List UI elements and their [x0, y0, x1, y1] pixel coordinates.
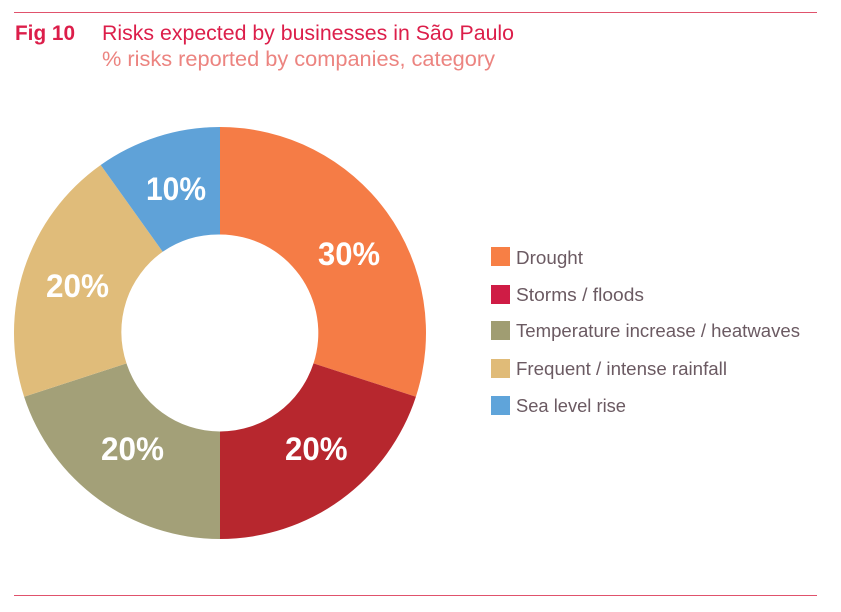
legend item: drought: Drought — [516, 247, 584, 268]
legend item: frequent / intense rainfall: Frequent / intense rainfall — [516, 358, 727, 379]
figure number: Fig 10 — [15, 22, 75, 45]
legend — [491, 247, 800, 416]
value label: 20% temperature: 20% — [101, 431, 164, 467]
segment: storms / floods 20% — [220, 363, 416, 539]
segment: sea level rise 10% — [101, 127, 220, 252]
legend item: sea level rise: Sea level rise — [516, 395, 626, 416]
legend item: temperature increase / heatwaves: Temperature increase / heatwaves — [516, 320, 800, 341]
value label: 10%: 10% — [146, 171, 206, 207]
value label: 20% storms: 20% — [285, 431, 348, 467]
value label: 20% rainfall: 20% — [46, 268, 109, 304]
segment: frequent / intense rainfall 20% — [14, 165, 163, 397]
donut chart — [14, 127, 426, 539]
legend item: storms / floods: Storms / floods — [516, 284, 644, 305]
segment: drought 30% — [220, 127, 426, 397]
title: Risks expected by businesses in São Paulo — [102, 22, 514, 45]
value label: 30%: 30% — [318, 236, 380, 272]
segment: temperature increase / heatwaves 20% — [24, 363, 220, 539]
subtitle: % risks reported by companies, category — [102, 48, 496, 71]
